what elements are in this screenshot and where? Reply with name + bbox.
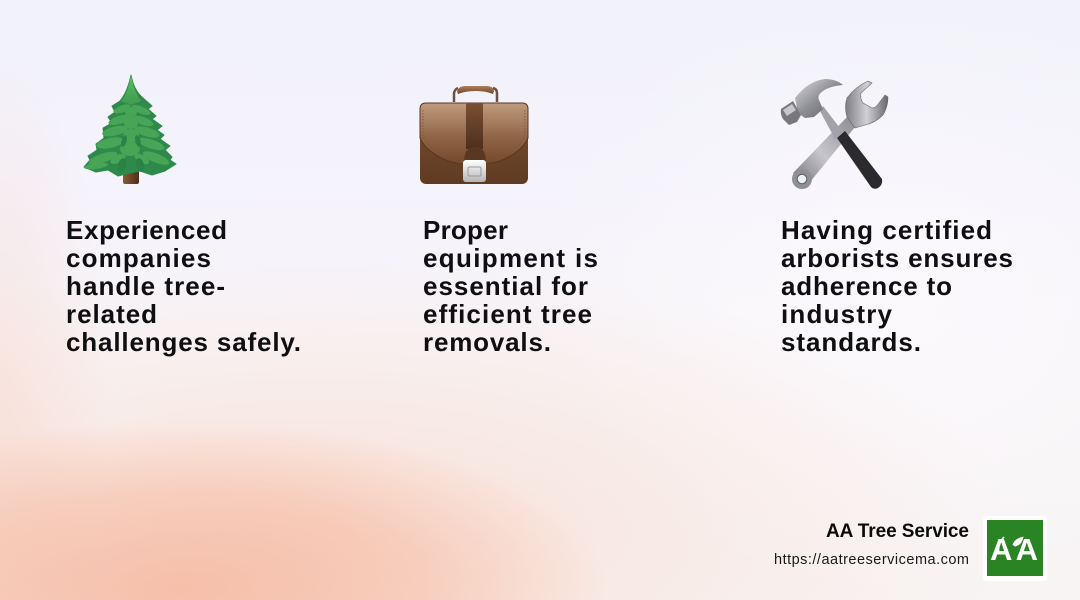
- text: experienced companies: related: [66, 299, 157, 329]
- brand name and url: [774, 521, 969, 568]
- text: proper equipment: Proper: [423, 215, 508, 245]
- panel: experienced companies: [66, 74, 301, 357]
- logo: AA: [990, 532, 1038, 567]
- text: experienced companies: challenges safely.: [66, 327, 301, 357]
- footer brand: [774, 516, 1047, 581]
- text: proper equipment: essential for: [423, 271, 588, 301]
- text: experienced companies: Experienced: [66, 215, 227, 245]
- text: proper equipment: removals.: [423, 327, 551, 357]
- text: proper equipment: [423, 215, 598, 357]
- text: experienced companies: [66, 215, 301, 357]
- text: certified arborists: [781, 215, 1013, 357]
- icon: hammer and wrench: [780, 79, 888, 189]
- brand name and url: AA Tree Service: [826, 521, 969, 542]
- text: certified arborists: standards.: [781, 327, 921, 357]
- wrench: [792, 81, 888, 189]
- text: proper equipment: efficient tree: [423, 299, 592, 329]
- text: certified arborists: arborists ensures: [781, 243, 1013, 273]
- logo: [983, 516, 1047, 581]
- hammer: [781, 79, 882, 189]
- panel: proper equipment: [420, 86, 598, 357]
- icon: evergreen tree: [84, 74, 176, 184]
- text: experienced companies: companies: [66, 243, 211, 273]
- text: certified arborists: adherence to: [781, 271, 952, 301]
- text: proper equipment: equipment is: [423, 243, 598, 273]
- text: certified arborists: industry: [781, 299, 893, 329]
- icon: briefcase: [420, 86, 528, 184]
- panel: certified arborists: [780, 79, 1013, 357]
- text: certified arborists: Having certified: [781, 215, 992, 245]
- brand name and url: https://aatreeservicema.com: [774, 552, 969, 568]
- text: experienced companies: handle tree-: [66, 271, 225, 301]
